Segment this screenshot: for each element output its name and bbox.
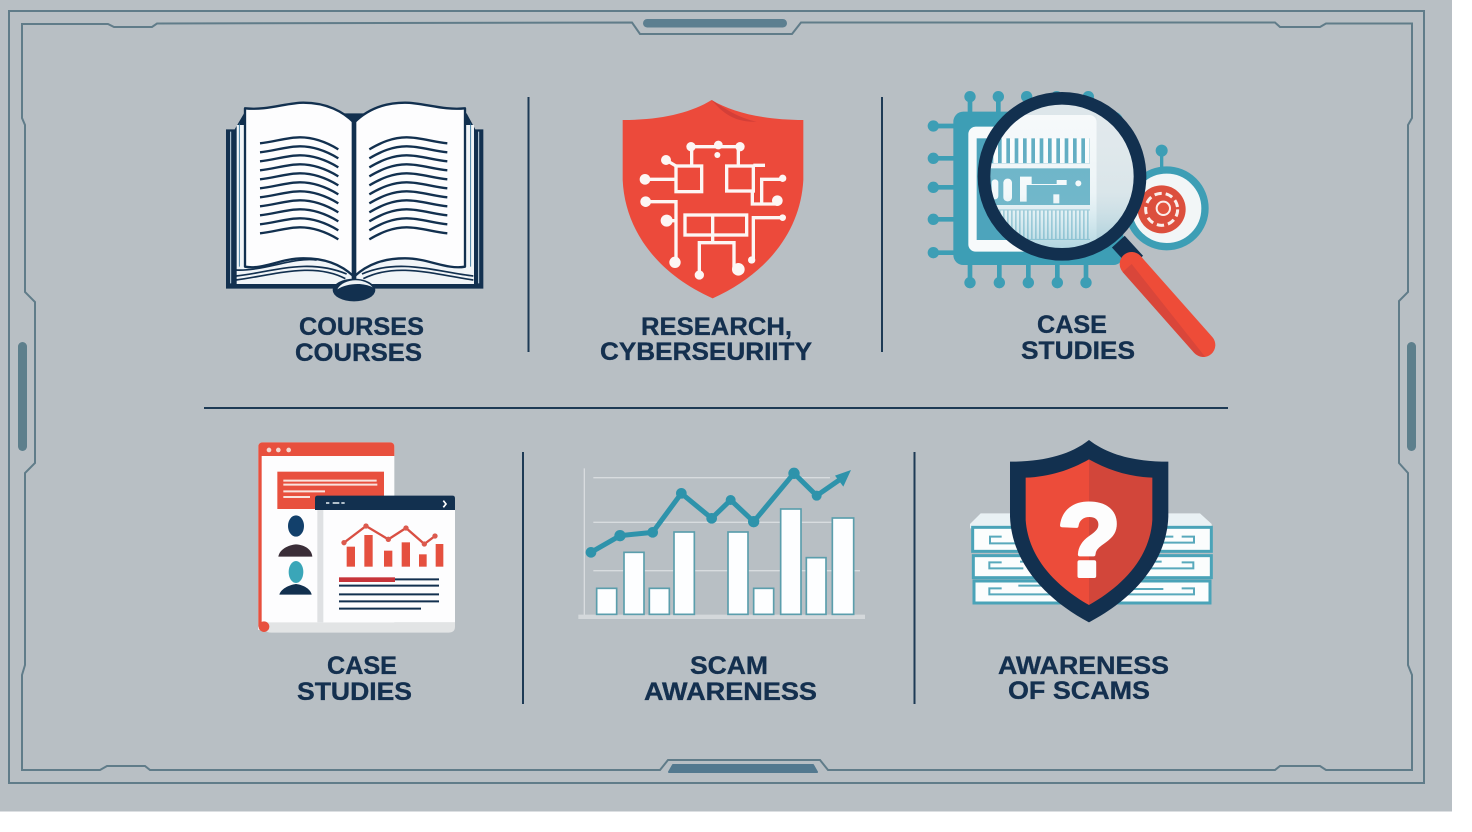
- panel: courses: [226, 103, 483, 367]
- heading: case studies top: [1021, 311, 1135, 365]
- heading: awareness of scams: [998, 652, 1169, 705]
- heading: courses: COURSES: [295, 339, 422, 367]
- mini bar chart: [347, 535, 443, 567]
- icon: open book: [226, 103, 483, 301]
- server stack: [970, 513, 1212, 603]
- divider: bottom row right: [914, 452, 916, 704]
- heading: awareness of scams: OF SCAMS: [1008, 677, 1150, 705]
- icon: report windows: [258, 442, 455, 633]
- person: navy: [278, 515, 312, 557]
- text lines: [339, 579, 439, 609]
- heading: case studies bottom: [297, 652, 412, 706]
- panel: case studies top: [928, 91, 1205, 365]
- chart: bars with rising line: [578, 468, 865, 619]
- top bar: [643, 19, 787, 28]
- trend line: [586, 468, 851, 558]
- handle: [1118, 242, 1137, 262]
- heading: case studies bottom: CASE: [327, 652, 397, 680]
- panel: scam awareness: [578, 468, 865, 706]
- heading: courses: [295, 313, 424, 367]
- chip pins: [928, 91, 1094, 288]
- text lines: right page: [369, 137, 447, 239]
- heading: scam awareness: [644, 652, 817, 706]
- icon: circuit shield: [623, 100, 803, 298]
- heading: research: RESEARCH,: [641, 313, 792, 341]
- heading: research: [600, 313, 812, 366]
- lens ring: [984, 98, 1140, 254]
- bottom bar: [669, 765, 817, 772]
- lens glass: [984, 98, 1140, 254]
- heading: case studies top: CASE: [1037, 311, 1107, 339]
- icon: magnifier over chip: [928, 91, 1205, 357]
- panel: case studies bottom: [258, 442, 455, 706]
- question mark: ?: [1057, 483, 1121, 599]
- small gauge: [1128, 145, 1205, 247]
- left bar: [18, 342, 27, 451]
- heading: case studies top: STUDIES: [1021, 337, 1135, 365]
- front window: [317, 509, 455, 622]
- right bar: [1407, 342, 1416, 451]
- icon: shield on server stack: [970, 440, 1212, 622]
- heading: awareness of scams: AWARENESS: [998, 652, 1169, 680]
- text lines: left page: [260, 137, 338, 239]
- divider: horizontal: [204, 407, 1228, 409]
- panel: awareness of scams: [970, 440, 1212, 705]
- heading: courses: COURSES: [299, 313, 424, 341]
- divider: top row right: [881, 97, 883, 352]
- heading: scam awareness: AWARENESS: [644, 678, 817, 706]
- person: teal: [279, 561, 312, 595]
- divider: top row left: [528, 97, 530, 352]
- heading: research: CYBERSEURIITY: [600, 338, 812, 366]
- shield: [1010, 440, 1168, 622]
- heading: scam awareness: SCAM: [690, 652, 768, 680]
- divider: bottom row left: [522, 452, 524, 704]
- heading: case studies bottom: STUDIES: [297, 678, 412, 706]
- chip body: [953, 112, 1123, 265]
- panel: research cybersecurity: [600, 100, 812, 366]
